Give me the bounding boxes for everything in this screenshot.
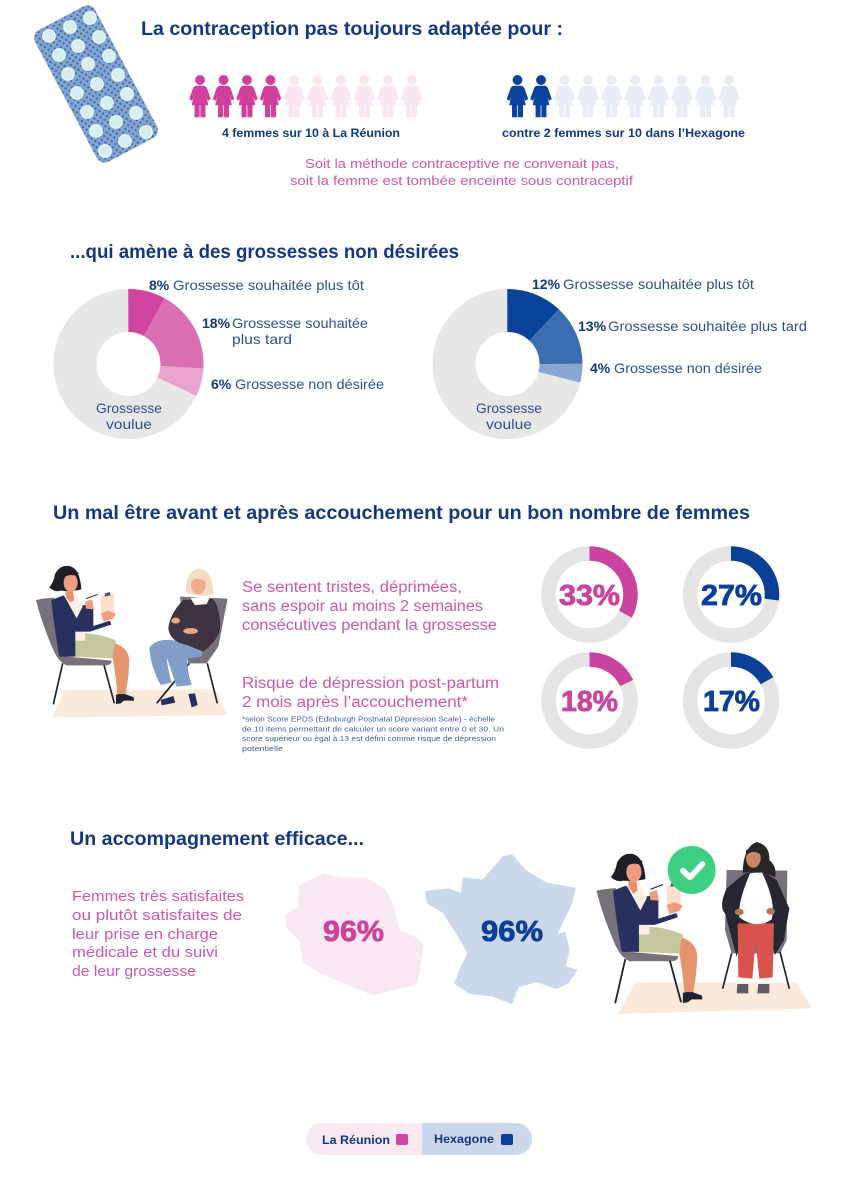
illustration: consultation with sad woman [36, 566, 228, 718]
label: La Réunion women: 4 femmes sur 10 à La Réunion [222, 128, 400, 140]
text block: sad during pregnancy [242, 579, 497, 634]
ring chart: 18% La Réunion: 18% [561, 686, 618, 718]
donut labels: Hexagone: Grossesse [476, 400, 542, 416]
text block: sad during pregnancy: Se sentent tristes, déprimées, [242, 579, 462, 596]
text block: satisfied women: leur prise en charge [72, 926, 218, 943]
donut chart: La Réunion [75, 310, 182, 418]
map: La Réunion 96%: 96% [323, 916, 384, 948]
ring chart: 18% La Réunion [548, 660, 630, 742]
pictogram: 2 women out of 10 in Hexagone [507, 75, 740, 117]
ring chart: 17% Hexagone [690, 660, 772, 742]
donut labels: Hexagone: Grossesse souhaitée plus tôt [563, 276, 754, 292]
ring chart: 33% La Réunion [548, 554, 630, 636]
text block: satisfied women: ou plutôt satisfaites de [72, 907, 242, 924]
legend [306, 1123, 532, 1155]
donut labels: Hexagone: 12% [532, 276, 561, 292]
illustration: consultation with pregnant woman [596, 842, 812, 1014]
ring chart: 27% Hexagone: 27% [701, 580, 762, 612]
text block: satisfied women: de leur grossesse [72, 963, 196, 980]
donut labels: La Réunion: voulue [106, 416, 152, 432]
text block: post-partum depression risk: 2 mois après l’accouchement* [242, 694, 468, 711]
footnote: EPDS score: potentielle [242, 744, 283, 753]
text block: sad during pregnancy: sans espoir au moins 2 semaines [242, 598, 483, 615]
ring chart: 33% La Réunion: 33% [559, 580, 620, 612]
icon: contraceptive pill blister [31, 2, 161, 166]
heading: malaise before and after childbirth: Un mal être avant et après accouchement pour un bon nombre de femmes [53, 503, 750, 524]
donut labels: La Réunion: 8% [149, 277, 170, 293]
donut labels: Hexagone [476, 276, 807, 432]
donut labels: La Réunion: Grossesse souhaitée plus tôt [173, 277, 364, 293]
ring chart: 17% Hexagone: 17% [703, 686, 760, 718]
text block: satisfied women: Femmes très satisfaites [72, 888, 244, 905]
donut labels: Hexagone: 13% [578, 318, 607, 334]
map: France 96%: 96% [481, 916, 543, 948]
donut labels: La Réunion: Grossesse non désirée [235, 376, 384, 392]
label: Hexagone women: contre 2 femmes sur 10 dans l’Hexagone [502, 128, 745, 140]
text block: sad during pregnancy: consécutives pendant la grossesse [242, 617, 497, 634]
footnote: EPDS score: score supérieur ou égal à 13 est défini comme risque de dépression [242, 734, 496, 743]
text block: satisfied women: médicale et du suivi [72, 944, 218, 961]
text block: contraception explanation [290, 156, 633, 188]
donut labels: La Réunion: Grossesse [96, 400, 162, 416]
heading: effective support: Un accompagnement efficace... [70, 829, 364, 850]
footnote: EPDS score [242, 714, 504, 753]
map: France 96% [426, 855, 577, 1003]
donut labels: Hexagone: Grossesse non désirée [614, 360, 762, 376]
donut labels: La Réunion: Grossesse souhaitée [232, 315, 368, 331]
text block: post-partum depression risk [242, 675, 499, 711]
text block: satisfied women [72, 888, 244, 980]
donut labels: La Réunion: 18% [202, 315, 231, 331]
donut labels: La Réunion [96, 277, 384, 432]
donut labels: Hexagone: Grossesse souhaitée plus tard [608, 318, 807, 334]
text block: post-partum depression risk: Risque de dépression post-partum [242, 675, 499, 692]
pictogram: 4 women out of 10 in La Réunion [190, 75, 422, 117]
text block: contraception explanation: soit la femme est tombée enceinte sous contraceptif [290, 173, 633, 188]
footnote: EPDS score: *selon Score EPDS (Edinburgh Postnatal Dépression Scale) - échelle [242, 714, 495, 724]
donut labels: Hexagone: voulue [486, 416, 532, 432]
heading: unwanted pregnancies: ...qui amène à des grossesses non désirées [70, 242, 459, 263]
footnote: EPDS score: de 10 items permettant de calculer un score variant entre 0 et 30. Un [242, 724, 504, 734]
donut chart: Hexagone [454, 310, 561, 418]
title: contraception: La contraception pas toujours adaptée pour : [141, 19, 563, 40]
ring chart: 27% Hexagone [690, 554, 772, 636]
text block: contraception explanation: Soit la méthode contraceptive ne convenait pas, [305, 156, 619, 171]
donut labels: La Réunion: plus tard [232, 331, 292, 347]
donut labels: Hexagone: 4% [590, 360, 611, 376]
legend: La Réunion [322, 1133, 390, 1147]
map: La Réunion 96% [287, 875, 423, 994]
donut labels: La Réunion: 6% [211, 376, 232, 392]
legend: Hexagone [434, 1132, 494, 1146]
